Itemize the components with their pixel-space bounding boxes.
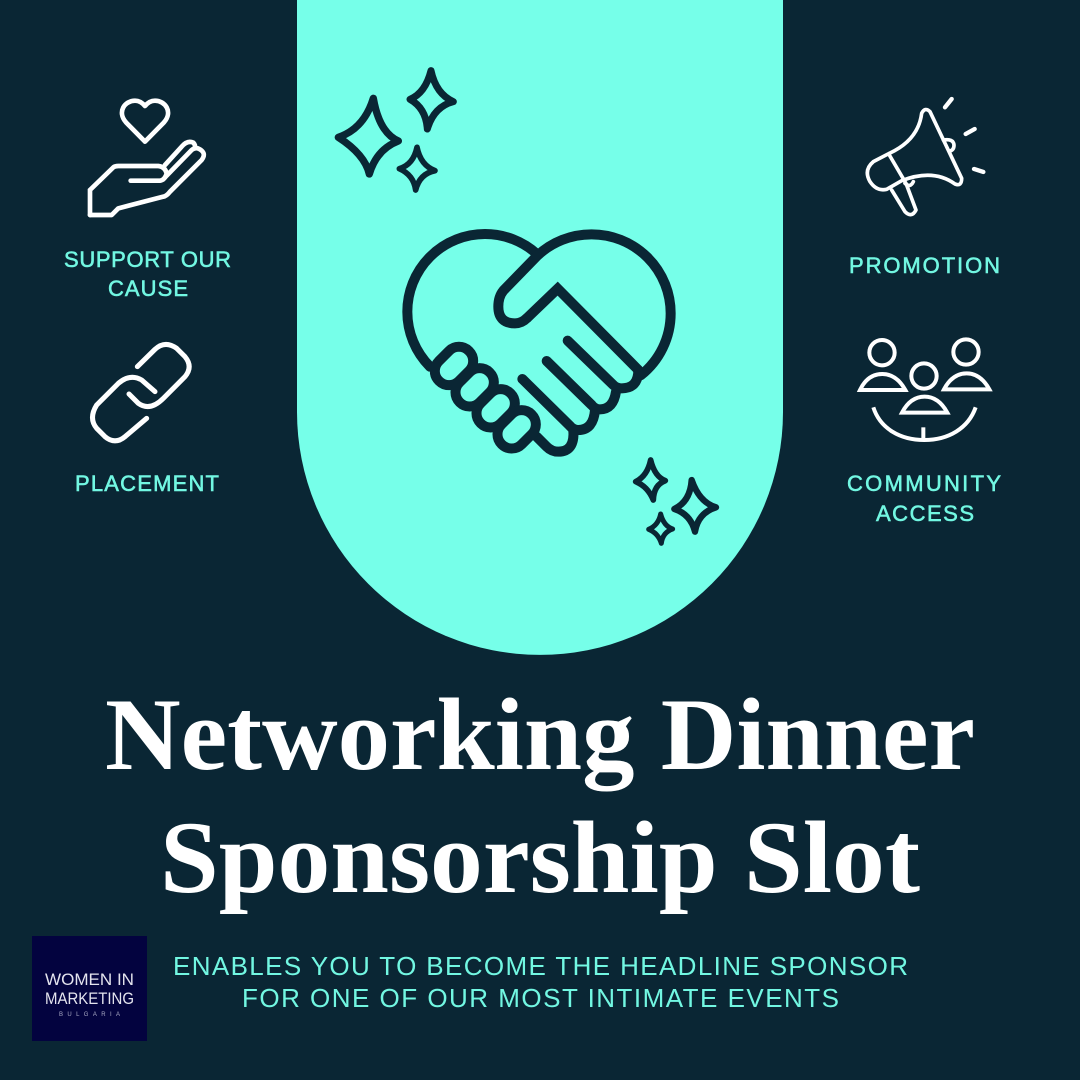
- title: Networking Dinner: [105, 678, 975, 792]
- icon: community group: [860, 339, 989, 440]
- icon: sparkles bottom right: [636, 460, 716, 543]
- icon: heart handshake: [407, 234, 671, 454]
- label: support our cause: [64, 247, 231, 301]
- icon: megaphone: [867, 99, 983, 215]
- logo: Women in Marketing Bulgaria: BULGARIA: [59, 1012, 120, 1018]
- label: community access: [847, 471, 1001, 526]
- logo: Women in Marketing Bulgaria: WOMEN IN: [45, 970, 134, 989]
- label: promotion: PROMOTION: [849, 253, 1000, 278]
- logo: Women in Marketing Bulgaria: MARKETING: [45, 989, 134, 1008]
- label: support our cause: CAUSE: [108, 276, 188, 301]
- icon: sparkles top left: [338, 71, 453, 190]
- title: Sponsorship Slot: [160, 801, 920, 915]
- label: support our cause: SUPPORT OUR: [64, 247, 231, 272]
- label: community access: ACCESS: [876, 501, 974, 526]
- panel: central mint arch: [297, 0, 783, 655]
- label: placement: PLACEMENT: [75, 471, 219, 496]
- title: [105, 678, 975, 915]
- icon: hand holding heart: [90, 101, 204, 215]
- text: description: ENABLES YOU TO BECOME THE HEADLINE SPONSOR: [173, 951, 908, 981]
- label: community access: COMMUNITY: [847, 471, 1001, 496]
- icon: chain link: [92, 344, 189, 441]
- logo: Women in Marketing Bulgaria: [32, 936, 147, 1041]
- text: description: [173, 951, 908, 1013]
- text: description: FOR ONE OF OUR MOST INTIMATE EVENTS: [242, 983, 839, 1013]
